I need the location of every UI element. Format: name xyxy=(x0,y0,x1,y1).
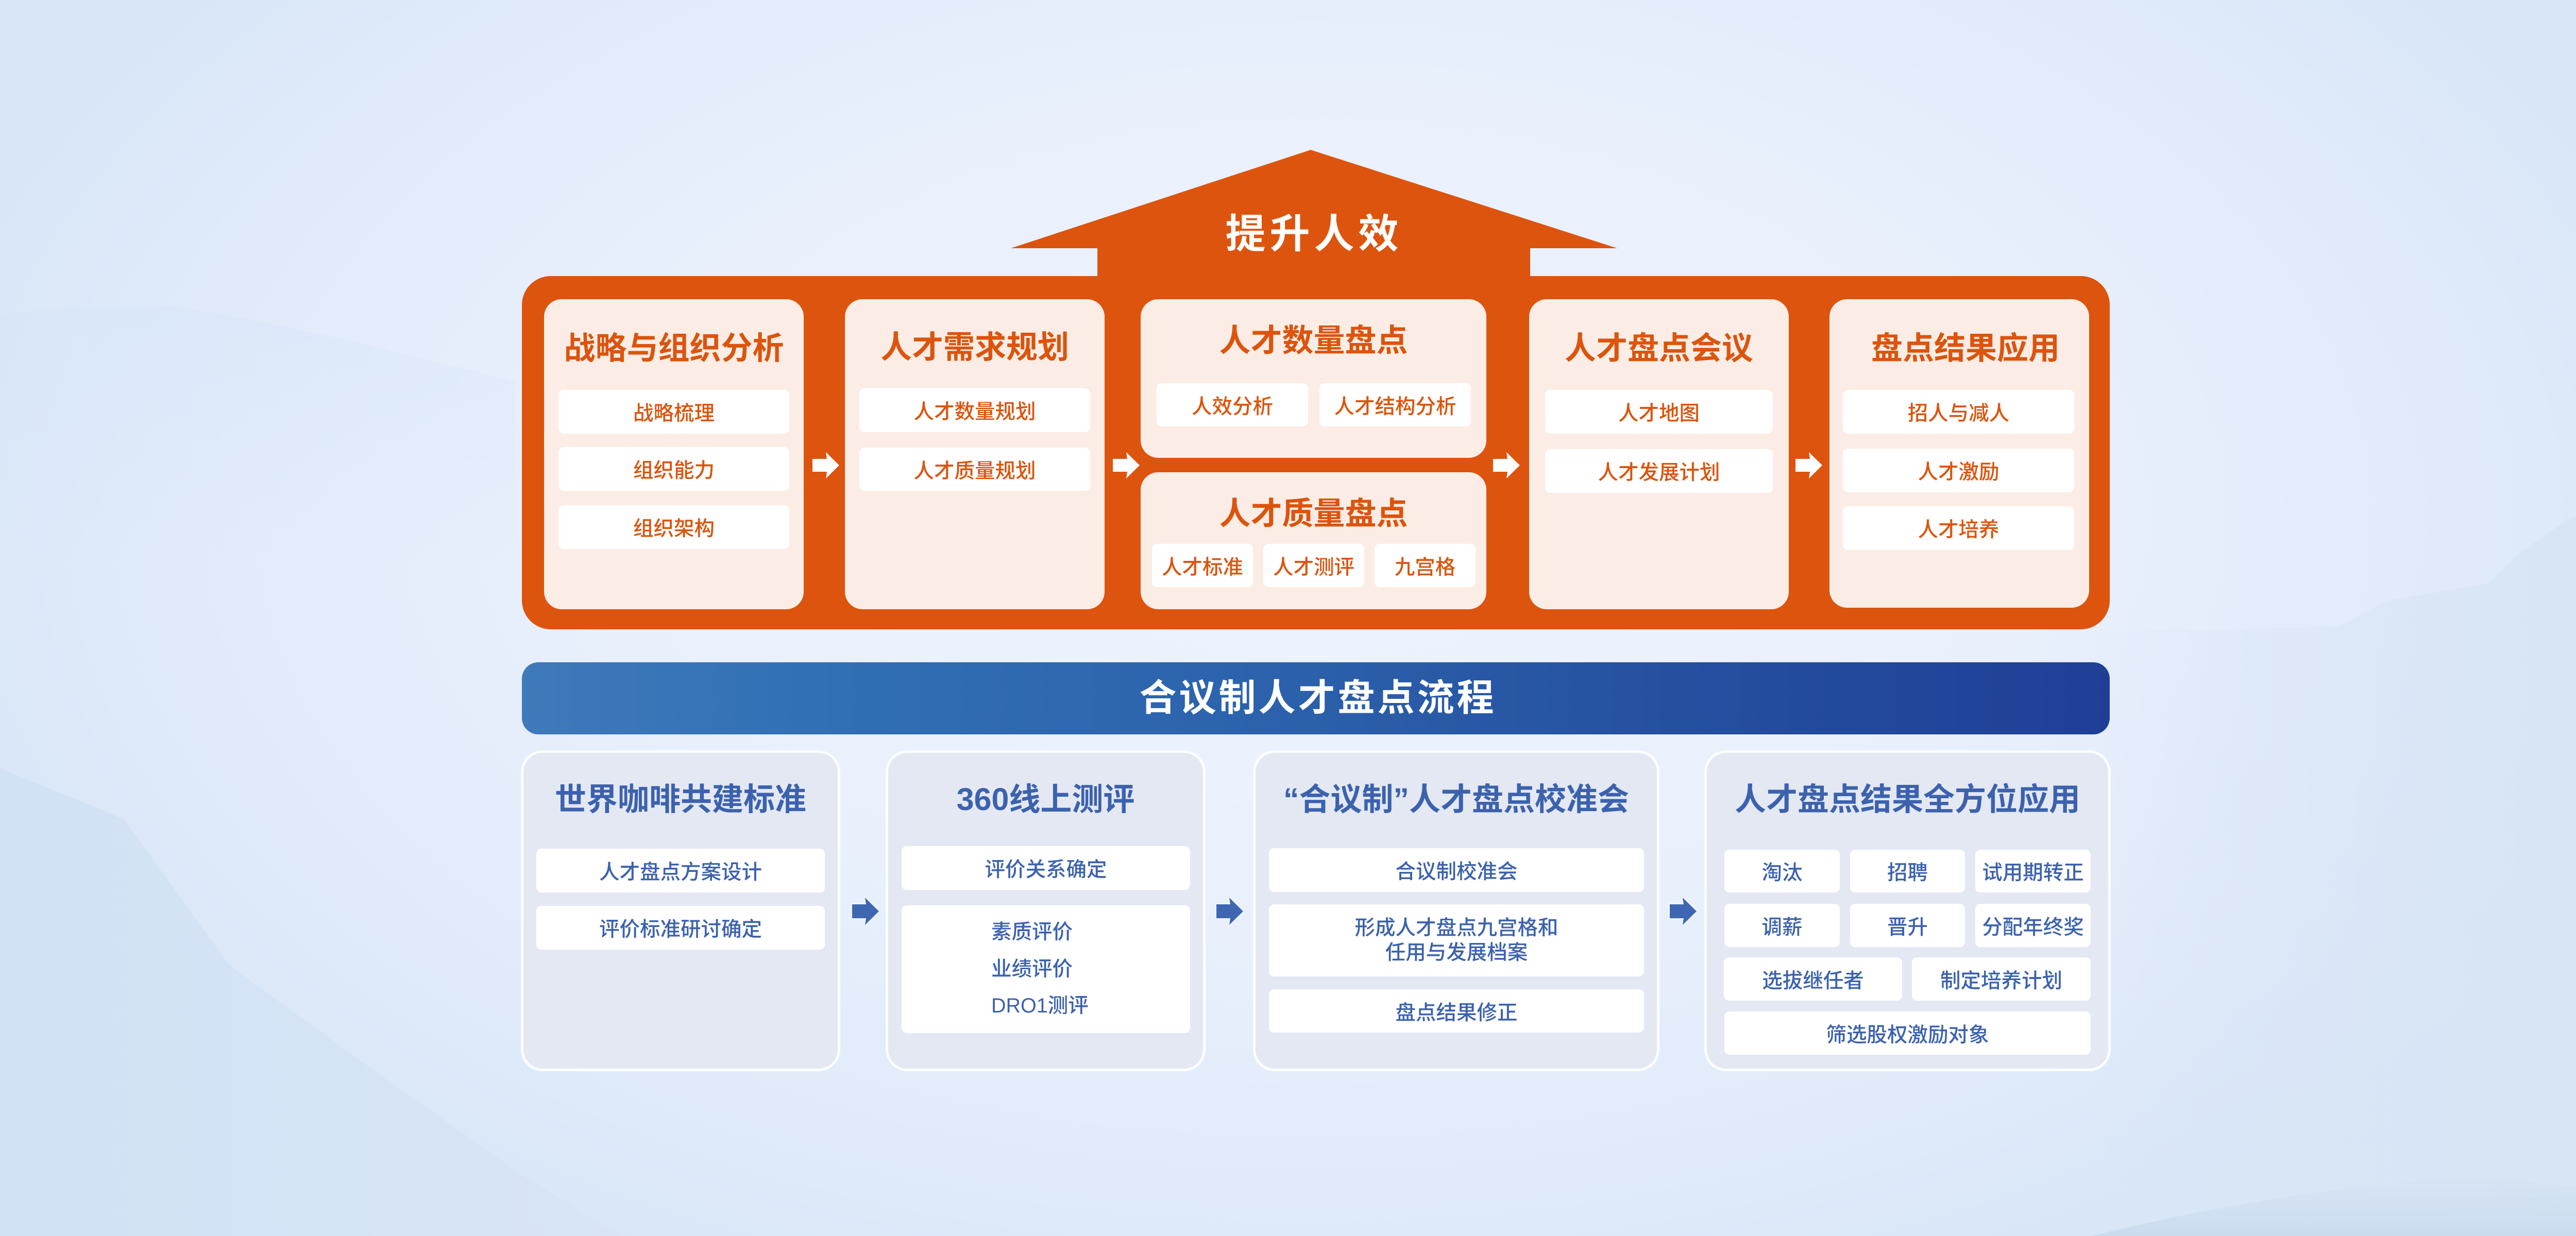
item xyxy=(1269,904,1644,976)
item: 分配年终奖 xyxy=(1982,916,2084,938)
item: 人才激励 xyxy=(1918,461,1999,484)
item xyxy=(1724,957,1902,1001)
heading: 世界咖啡共建标准 xyxy=(555,782,806,817)
item xyxy=(1724,904,1840,947)
item: evaluation list xyxy=(902,905,1190,1033)
panel: 人才盘点结果全方位应用 xyxy=(1704,750,2111,1071)
item: 组织架构 xyxy=(633,518,715,540)
panel: 合议制人才盘点校准会 xyxy=(1253,750,1659,1071)
item: evaluation list: 业绩评价 xyxy=(991,958,1073,981)
item: 九宫格 xyxy=(1395,556,1455,579)
item xyxy=(1152,544,1253,587)
item xyxy=(1724,850,1840,892)
item: evaluation list: 素质评价 xyxy=(991,921,1073,943)
card: 人才盘点会议 xyxy=(1529,299,1789,609)
item: 调薪 xyxy=(1762,916,1802,938)
heading: 360线上测评 xyxy=(957,782,1134,817)
item xyxy=(859,448,1090,491)
item: 盘点结果修正 xyxy=(1395,1001,1518,1024)
item xyxy=(1850,850,1965,892)
item xyxy=(1975,850,2091,892)
item: 人效分析 xyxy=(1192,396,1273,418)
item xyxy=(1545,449,1773,493)
item: 战略梳理 xyxy=(633,402,715,425)
item: 招聘 xyxy=(1887,862,1928,884)
item xyxy=(1843,390,2074,434)
item xyxy=(558,390,789,434)
item xyxy=(1912,957,2091,1001)
item: 评价标准研讨确定 xyxy=(599,918,762,941)
item: 招人与减人 xyxy=(1908,402,2009,425)
item xyxy=(1269,989,1644,1033)
item: 合议制校准会 xyxy=(1395,861,1518,883)
item: evaluation list: DRO1测评 xyxy=(991,994,1089,1017)
arrow: white 1 xyxy=(812,452,839,478)
item: 评价关系确定 xyxy=(985,859,1107,881)
item: 试用期转正 xyxy=(1982,862,2084,884)
arrow: blue 3 xyxy=(1669,898,1697,925)
item: 人才数量规划 xyxy=(914,401,1036,423)
item xyxy=(1319,383,1471,426)
arrow: white 3 xyxy=(1493,452,1520,478)
item: 人才结构分析 xyxy=(1334,396,1456,418)
item: 筛选股权激励对象 xyxy=(1826,1024,1989,1046)
item xyxy=(859,388,1090,432)
card: 战略与组织分析 xyxy=(544,299,804,609)
item xyxy=(1975,904,2091,947)
item xyxy=(1269,848,1644,892)
item xyxy=(558,447,789,491)
item: 人才标准 xyxy=(1162,556,1243,579)
arrow: white 2 xyxy=(1113,452,1140,478)
card: 人才需求规划 xyxy=(845,299,1105,609)
panel: 世界咖啡共建标准 xyxy=(521,750,840,1071)
arrow: blue 2 xyxy=(1216,898,1243,925)
heading: 人才数量盘点 xyxy=(1219,323,1408,358)
item: 人才质量规划 xyxy=(914,459,1036,482)
heading: 人才质量盘点 xyxy=(1219,496,1408,531)
heading: 人才需求规划 xyxy=(880,330,1069,365)
item xyxy=(1263,544,1364,587)
item: 淘汰 xyxy=(1762,862,1802,884)
heading: 战略与组织分析 xyxy=(564,331,784,366)
heading: 盘点结果应用 xyxy=(1871,331,2060,366)
arrow: white 4 xyxy=(1795,452,1822,478)
item: 人才培养 xyxy=(1918,519,1999,541)
banner: 合议制人才盘点流程: 合议制人才盘点流程 xyxy=(1139,678,1496,719)
arrow: blue 1 xyxy=(852,898,879,925)
item xyxy=(536,906,825,950)
icon: upward house-shaped arrow with title 提升人效 xyxy=(1011,150,1617,276)
item xyxy=(902,846,1190,890)
item: 制定培养计划 xyxy=(1940,969,2062,992)
banner: 合议制人才盘点流程 xyxy=(522,662,2110,734)
item xyxy=(1545,390,1773,434)
item xyxy=(1850,904,1965,947)
card: 人才数量盘点 xyxy=(1141,299,1486,458)
heading: “合议制”人才盘点校准会 xyxy=(1283,782,1629,817)
item xyxy=(1375,544,1476,587)
heading: 提升人效: 提升人效 xyxy=(1225,211,1402,256)
heading: 人才盘点会议 xyxy=(1565,331,1753,366)
item xyxy=(558,505,789,549)
item xyxy=(1157,383,1308,426)
item: 选拔继任者 xyxy=(1762,969,1864,992)
item: 人才发展计划 xyxy=(1598,461,1720,484)
item: 组织能力 xyxy=(633,459,715,482)
item: 晋升 xyxy=(1887,916,1928,938)
item xyxy=(1843,449,2074,492)
item: 人才地图 xyxy=(1618,402,1700,425)
item: 任用与发展档案 xyxy=(1385,941,1528,964)
item xyxy=(1843,506,2074,550)
item: 形成人才盘点九宫格和 xyxy=(1355,917,1558,939)
card: 盘点结果应用 xyxy=(1829,299,2089,608)
item: 人才盘点方案设计 xyxy=(599,861,762,884)
item: 人才测评 xyxy=(1273,556,1354,579)
panel: orange talent review framework xyxy=(522,276,2110,629)
card: 人才质量盘点 xyxy=(1141,472,1486,609)
item xyxy=(1724,1011,2091,1055)
panel: 360线上测评 xyxy=(886,750,1206,1071)
item xyxy=(536,849,825,892)
heading: 人才盘点结果全方位应用 xyxy=(1735,782,2080,817)
